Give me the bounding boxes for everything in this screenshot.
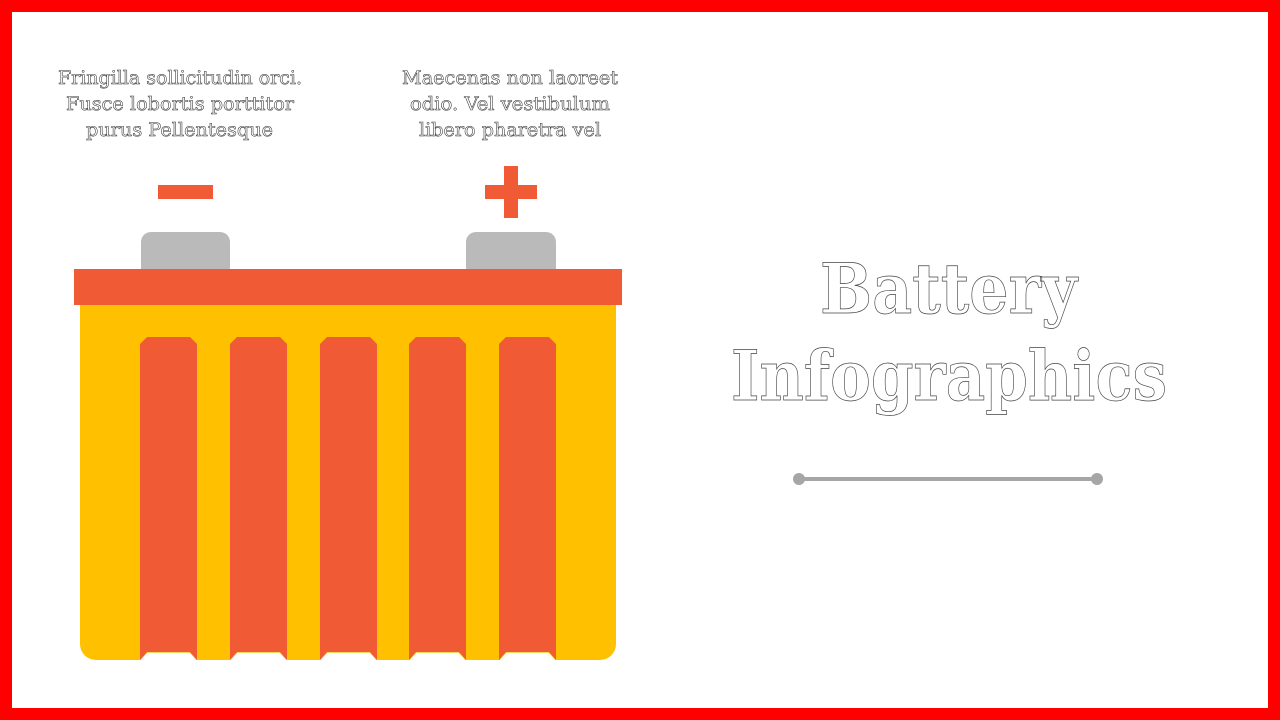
positive terminal post [466, 232, 556, 269]
title underline with end dots [793, 473, 1103, 485]
icon: plus sign [485, 166, 537, 218]
battery illustration [74, 232, 622, 660]
title [731, 249, 1167, 417]
text block: positive terminal [402, 67, 618, 141]
text block: negative terminal: purus Pellentesque [86, 119, 273, 141]
battery cells [140, 337, 556, 660]
text block: positive terminal: odio. Vel vestibulum [410, 93, 610, 115]
title: Battery [820, 249, 1079, 330]
text block: negative terminal: Fusce lobortis porttitor [66, 93, 295, 115]
text block: negative terminal [58, 67, 302, 141]
title: Infographics [731, 336, 1167, 417]
text block: positive terminal: Maecenas non laoreet [402, 67, 618, 89]
negative terminal post [141, 232, 230, 269]
battery body [80, 305, 616, 660]
cell base notches [141, 653, 555, 660]
text block: negative terminal: Fringilla sollicitudin orci. [58, 67, 302, 89]
icon: minus sign [158, 185, 213, 199]
text block: positive terminal: libero pharetra vel [419, 119, 601, 141]
battery lid [74, 269, 622, 305]
